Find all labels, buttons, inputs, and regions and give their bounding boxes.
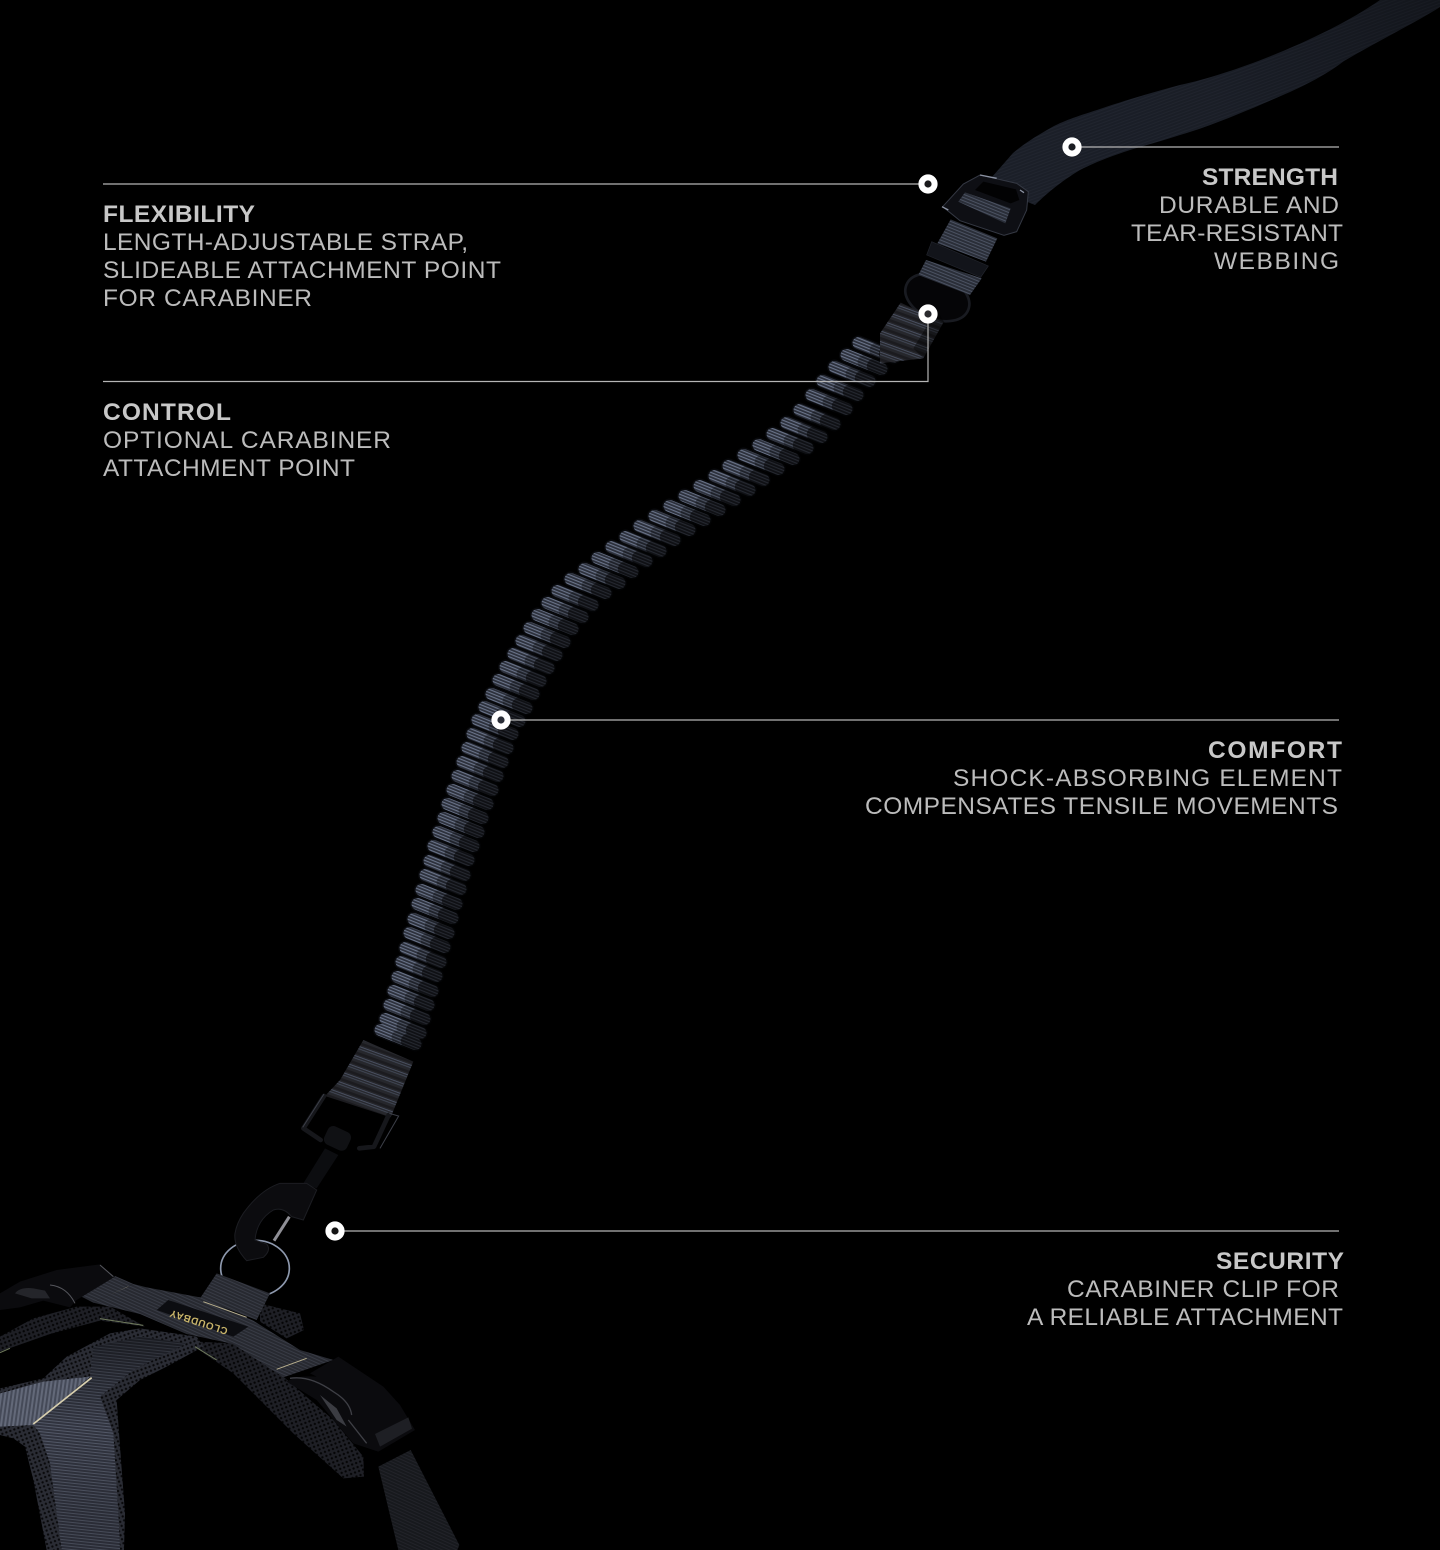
leash webbing strap (985, 0, 1440, 205)
marker: flexibility (103, 177, 935, 191)
callout: comfort: COMPENSATES TENSILE MOVEMENTS (865, 793, 1338, 820)
callout: flexibility: SLIDEABLE ATTACHMENT POINT (103, 257, 501, 284)
callout: security (1027, 1248, 1344, 1331)
callout: strength: DURABLE AND (1159, 192, 1339, 219)
chest webbing (33, 1337, 187, 1550)
callout: control (103, 399, 391, 482)
callout: security: A RELIABLE ATTACHMENT (1027, 1304, 1343, 1331)
callout: flexibility: FLEXIBILITY (103, 201, 255, 228)
woven brand label: CLOUDBAY (168, 1307, 229, 1336)
hook body (235, 1183, 317, 1261)
callout: control: CONTROL (103, 399, 231, 426)
callout: comfort: SHOCK-ABSORBING ELEMENT (953, 765, 1342, 792)
stitched strap end (325, 1040, 413, 1117)
chest side strap (0, 1377, 90, 1427)
shock-absorbing elastic section (380, 343, 894, 1044)
callout: strength: STRENGTH (1202, 164, 1338, 191)
chest webbing shading (33, 1337, 187, 1550)
strap through ring (918, 260, 982, 295)
marker: security (328, 1224, 1339, 1238)
lower right mesh edge (197, 1342, 364, 1478)
callout: security: SECURITY (1216, 1248, 1344, 1275)
left strap (75, 1276, 133, 1303)
woven brand label (157, 1300, 248, 1337)
adjuster hardware and strap (880, 175, 1028, 363)
callout: strength: WEBBING (1214, 248, 1339, 275)
metal ring (221, 1240, 289, 1296)
callout: security: CARABINER CLIP FOR (1067, 1276, 1339, 1303)
upper left mesh arc (0, 1307, 145, 1352)
upper strap (937, 219, 997, 262)
gate wire (274, 1217, 289, 1241)
hook shaft (303, 1148, 338, 1188)
callout: control: OPTIONAL CARABINER (103, 427, 391, 454)
marker: strength (1065, 140, 1339, 154)
callout lines and markers (103, 140, 1339, 1238)
callout: strength: TEAR-RESISTANT (1131, 220, 1343, 247)
chest stitch (33, 1378, 92, 1424)
callout: flexibility (103, 201, 501, 312)
ring tab (200, 1273, 270, 1320)
swivel D-ring (303, 1096, 389, 1148)
triangular adjuster (943, 175, 1028, 235)
callout: strength (1131, 164, 1343, 275)
lower O-ring (898, 264, 976, 330)
elastic end tack and snap hook carabiner (221, 1040, 413, 1296)
swivel barrel (322, 1124, 353, 1153)
callout: comfort (865, 737, 1342, 820)
back mesh panel (260, 1303, 304, 1338)
top webbing strap (93, 1284, 333, 1377)
dog harness (0, 1264, 459, 1550)
marker: control (103, 307, 935, 382)
left buckle (0, 1264, 115, 1310)
slider keeper (927, 242, 988, 277)
marker: comfort (494, 713, 1339, 727)
flat strap below ring (880, 303, 943, 363)
right buckle (287, 1357, 415, 1452)
lower right strap (378, 1450, 459, 1550)
callout: flexibility: LENGTH-ADJUSTABLE STRAP, (103, 229, 468, 256)
chest mesh panel (0, 1328, 203, 1550)
stitches (98, 1286, 307, 1369)
callout: comfort: COMFORT (1208, 737, 1342, 764)
callout: flexibility: FOR CARABINER (103, 285, 312, 312)
callout: control: ATTACHMENT POINT (103, 455, 355, 482)
